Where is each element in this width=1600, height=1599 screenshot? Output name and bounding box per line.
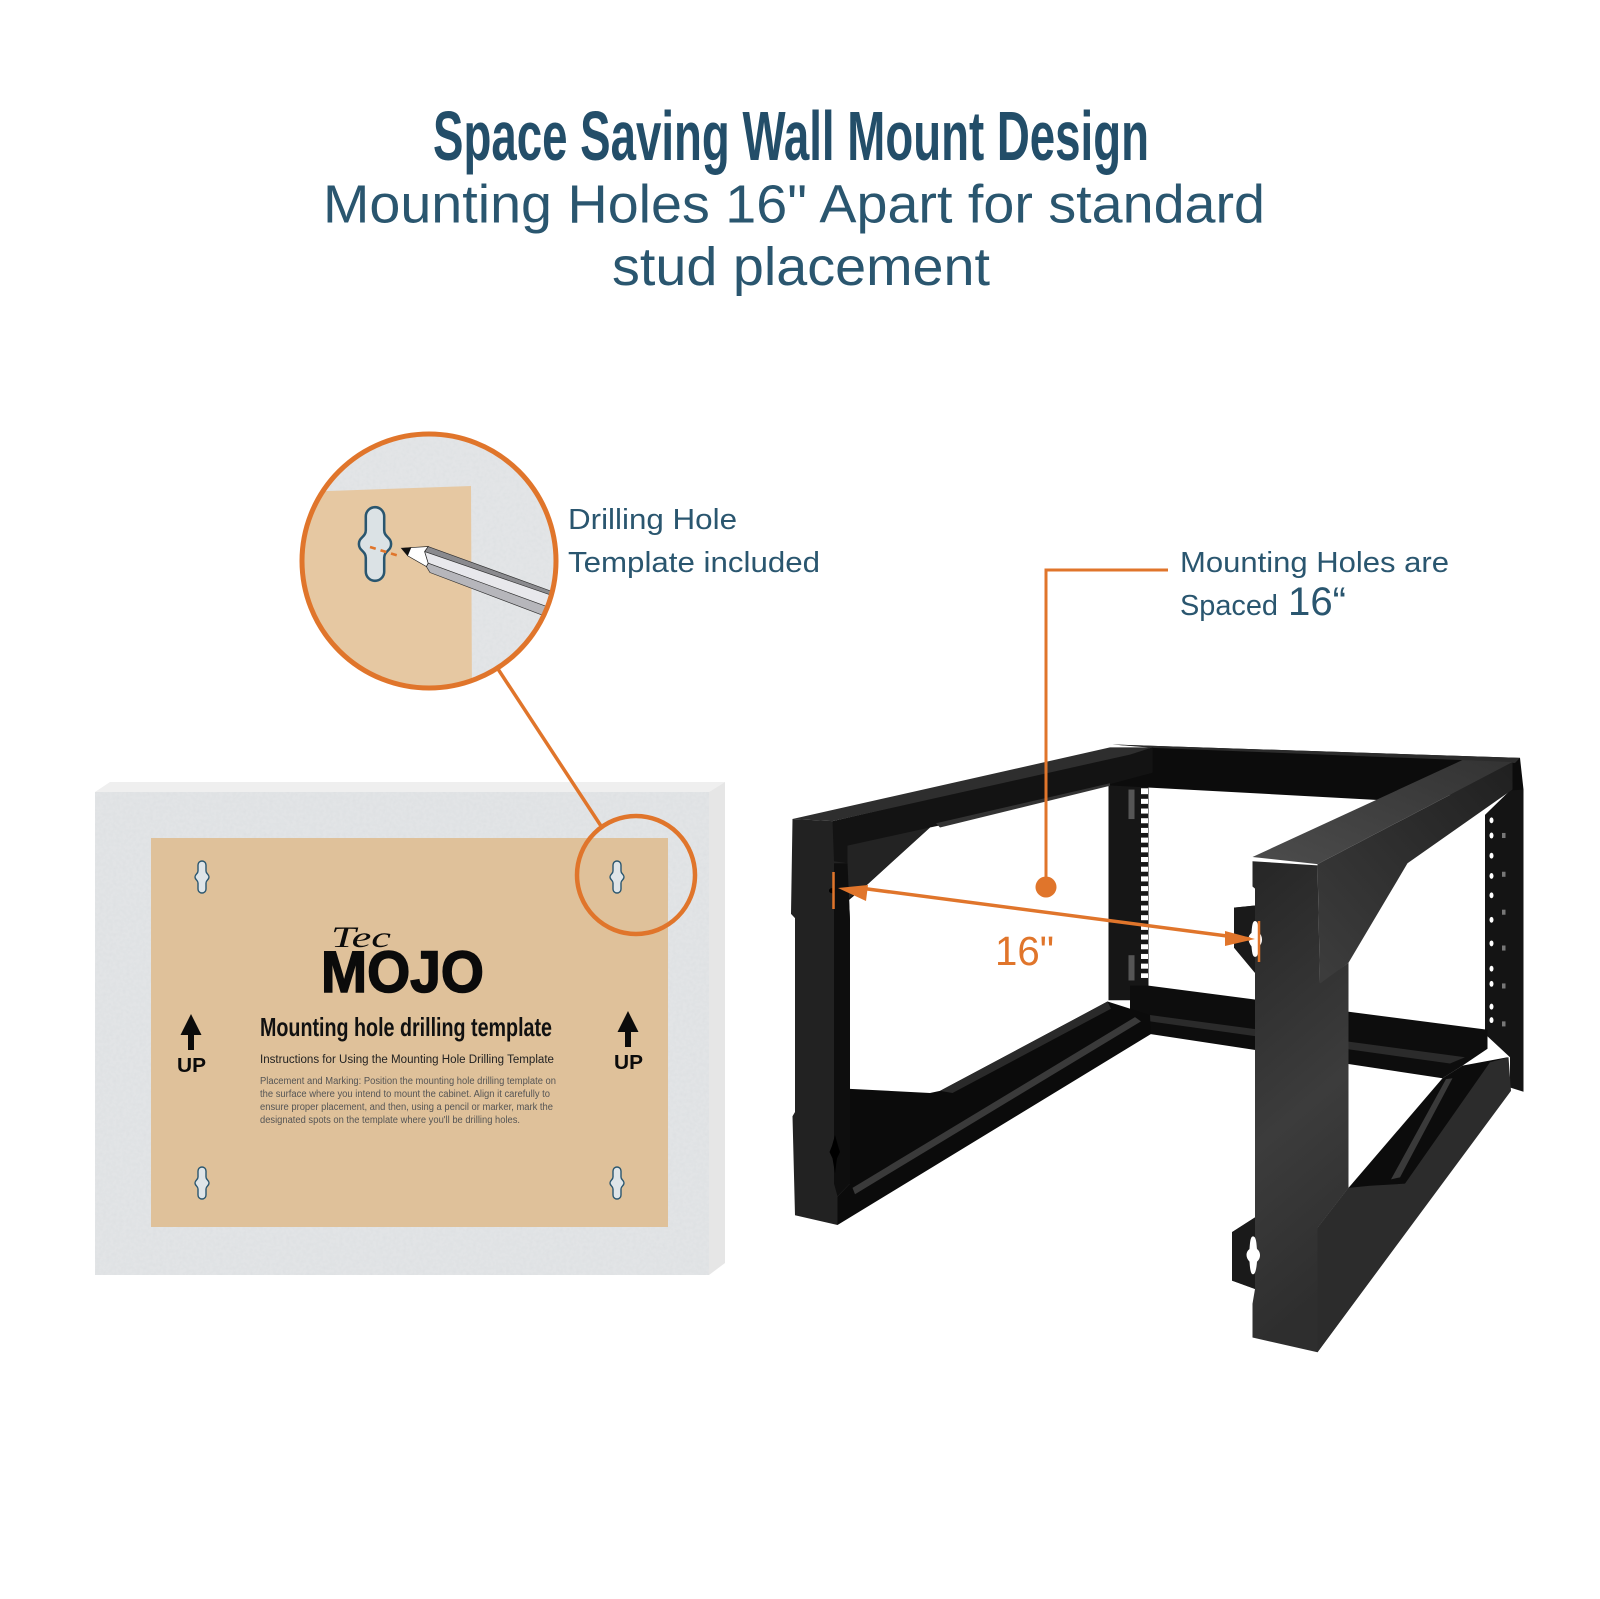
wall texture in circle <box>304 436 554 686</box>
dimension label: 16" <box>995 928 1054 974</box>
up arrow left: UP <box>177 1055 206 1077</box>
wall block face <box>95 792 709 1275</box>
rear bottom beam <box>1130 986 1488 1078</box>
subtitle: Mounting Holes 16" Apart for standard <box>323 174 1265 234</box>
up arrow right <box>614 1011 643 1074</box>
left front post <box>791 819 850 1225</box>
right front post <box>1232 861 1348 1352</box>
template instructions <box>260 1054 556 1126</box>
callout dot <box>1036 876 1056 898</box>
up arrow right: UP <box>614 1052 643 1074</box>
mounting hole bottom left <box>195 1167 209 1199</box>
rear bottom beam highlight <box>1150 1015 1465 1064</box>
template heading: Mounting hole drilling template <box>260 1012 552 1042</box>
rear top beam <box>1108 744 1524 800</box>
small orange highlight circle <box>577 816 695 934</box>
label: mounting holes spaced: Mounting Holes are <box>1180 547 1449 579</box>
mounting hole bottom right <box>610 1167 624 1199</box>
label: drilling hole template: Drilling Hole <box>568 504 737 536</box>
title: Space Saving Wall Mount Design <box>433 97 1149 175</box>
rear right post <box>1485 790 1524 1092</box>
label: mounting holes spaced <box>1180 547 1449 624</box>
left upper arm <box>792 747 1152 901</box>
rear left post <box>1108 783 1148 1000</box>
template instructions: the surface where you intend to mount the cabinet. Align it carefully to <box>260 1089 550 1100</box>
magnified detail circle <box>300 430 560 700</box>
rack: open frame wall mount <box>791 744 1524 1352</box>
subtitle: stud placement <box>612 237 990 297</box>
callout leader line <box>1046 570 1168 887</box>
drill mark dashes <box>370 547 399 556</box>
label: drilling hole template: Template included <box>568 547 820 579</box>
template instructions: Instructions for Using the Mounting Hole Drilling Template <box>260 1054 554 1066</box>
magnifier ring <box>302 434 556 688</box>
magnified mounting hole <box>359 507 391 581</box>
magnifier connector line <box>498 669 601 826</box>
mounting hole top left <box>195 861 209 893</box>
up arrow left <box>177 1014 206 1077</box>
template instructions: designated spots on the template where you'll be drilling holes. <box>260 1115 520 1126</box>
template instructions: Placement and Marking: Position the mounting hole drilling template on <box>260 1076 556 1087</box>
logo: Tec MOJO: Tec <box>331 921 391 954</box>
wall block sides <box>95 782 725 792</box>
left lower rail <box>838 1002 1151 1225</box>
right lower rail <box>1318 1057 1511 1352</box>
template sheet <box>151 838 668 1227</box>
logo: Tec MOJO: MOJO <box>321 940 484 1005</box>
template instructions: ensure proper placement, and then, using a pencil or marker, mark the <box>260 1102 553 1113</box>
rear top beam upper lip <box>1112 744 1520 763</box>
label: mounting holes spaced: Spaced <box>1180 590 1278 622</box>
mounting hole top right <box>610 861 624 893</box>
right upper arm <box>1252 760 1512 985</box>
label: drilling hole template <box>568 504 820 579</box>
dimension arrow: 16 inch spacing <box>834 872 1259 962</box>
label: mounting holes spaced: 16“ <box>1288 580 1346 624</box>
icon: pencil <box>401 547 557 617</box>
subtitle <box>323 174 1265 297</box>
panel: wall with drilling template <box>95 782 725 1275</box>
